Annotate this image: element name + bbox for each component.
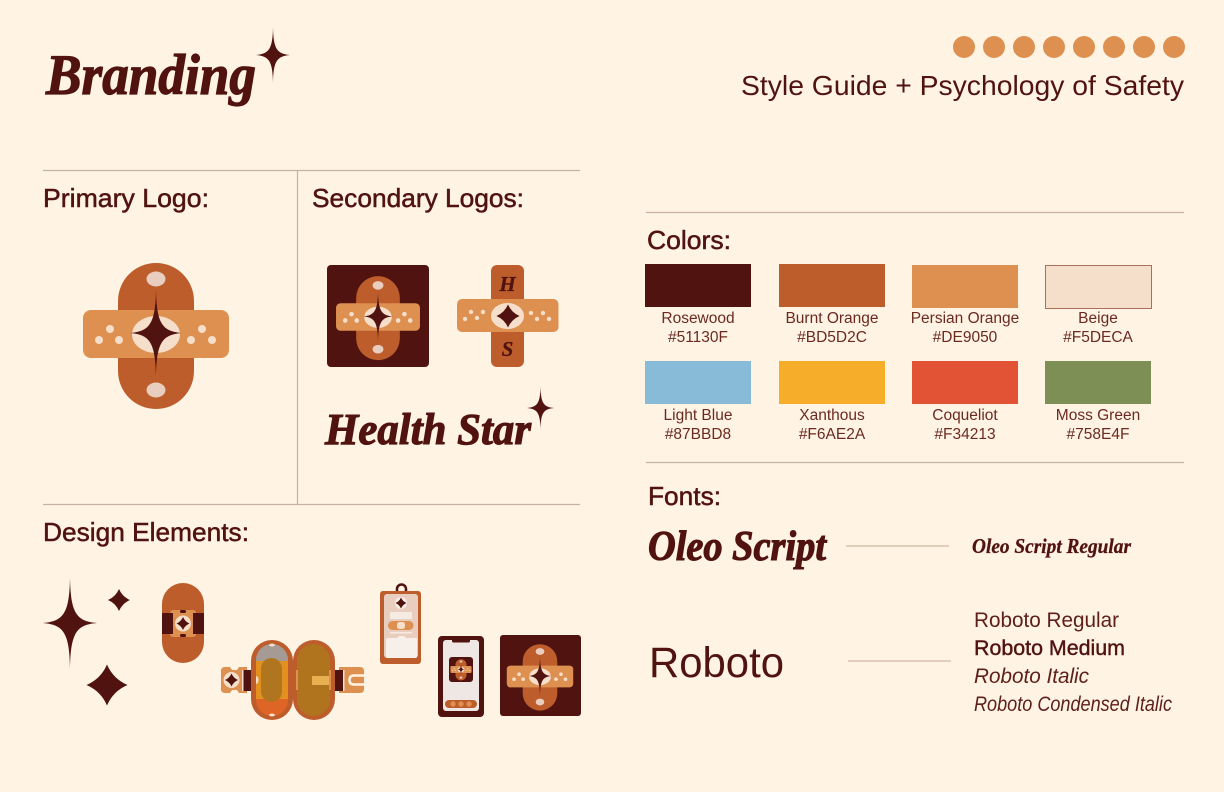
secondary logo: bandage with initials: S: [502, 337, 513, 361]
color swatch: coquelicot: Coqueliot: [932, 407, 998, 424]
color swatch: xanthous: #F6AE2A: [799, 426, 866, 443]
heading: design elements: Design Elements:: [43, 517, 249, 547]
color swatch: moss green: [1045, 361, 1151, 443]
color swatch: rosewood: #51130F: [668, 329, 728, 346]
font sample: roboto: Roboto: [649, 639, 784, 687]
heading: colors: Colors:: [647, 225, 731, 255]
color swatch: rosewood: Rosewood: [661, 310, 735, 327]
design element: open bandage packaging: [221, 640, 364, 720]
design element: id badge: [380, 584, 421, 664]
primary logo: [83, 263, 229, 409]
design element: stars: [43, 577, 130, 706]
font sample: oleo script: Oleo Script Regular: [972, 534, 1132, 558]
design element: app tile: [500, 635, 581, 716]
header dots: [953, 36, 1185, 58]
design element: phone with app: [438, 636, 484, 717]
color swatch: burnt orange: Burnt Orange: [785, 310, 879, 327]
title: Branding: [45, 44, 256, 107]
heading: secondary logos: Secondary Logos:: [312, 183, 524, 213]
color swatch: persian orange: Persian Orange: [911, 310, 1019, 327]
font sample: roboto: [649, 609, 1172, 716]
subtitle: Style Guide + Psychology of Safety: [741, 70, 1184, 101]
color swatch: light blue: #87BBD8: [665, 426, 731, 443]
color swatch: moss green: Moss Green: [1056, 407, 1140, 424]
color swatch: light blue: [645, 361, 751, 443]
color swatch: persian orange: [911, 265, 1019, 346]
font sample: roboto: Roboto Medium: [974, 637, 1125, 660]
secondary logo: wordmark: [324, 386, 554, 454]
color swatch: coquelicot: [912, 361, 1018, 443]
color swatch: beige: #F5DECA: [1063, 329, 1134, 346]
color swatch: xanthous: [779, 361, 885, 443]
color swatch: persian orange: #DE9050: [933, 329, 998, 346]
heading: fonts: Fonts:: [648, 481, 721, 511]
secondary logo: bandage with initials: H: [498, 272, 516, 296]
secondary logo: wordmark: Health Star: [324, 405, 532, 454]
color swatch: burnt orange: [779, 264, 885, 346]
color swatch: beige: [1046, 266, 1152, 346]
color swatch: rosewood: [645, 264, 751, 346]
design element: wrapped bandage: [162, 583, 204, 663]
secondary logo: dark square: [327, 265, 429, 367]
secondary logo: bandage with initials: [457, 265, 558, 367]
font sample: oleo script: [648, 524, 1132, 570]
font sample: roboto: Roboto Condensed Italic: [974, 693, 1172, 716]
color swatch: light blue: Light Blue: [664, 407, 732, 424]
font sample: roboto: Roboto Italic: [974, 665, 1089, 688]
color swatch: burnt orange: #BD5D2C: [797, 329, 867, 346]
heading: primary logo: Primary Logo:: [43, 183, 209, 213]
font sample: oleo script: Oleo Script: [648, 524, 827, 570]
color swatch: moss green: #758E4F: [1067, 426, 1129, 443]
color swatch: coquelicot: #F34213: [934, 426, 996, 443]
color swatch: xanthous: Xanthous: [799, 407, 865, 424]
color swatch: beige: Beige: [1078, 310, 1118, 327]
font sample: roboto: Roboto Regular: [974, 609, 1119, 632]
